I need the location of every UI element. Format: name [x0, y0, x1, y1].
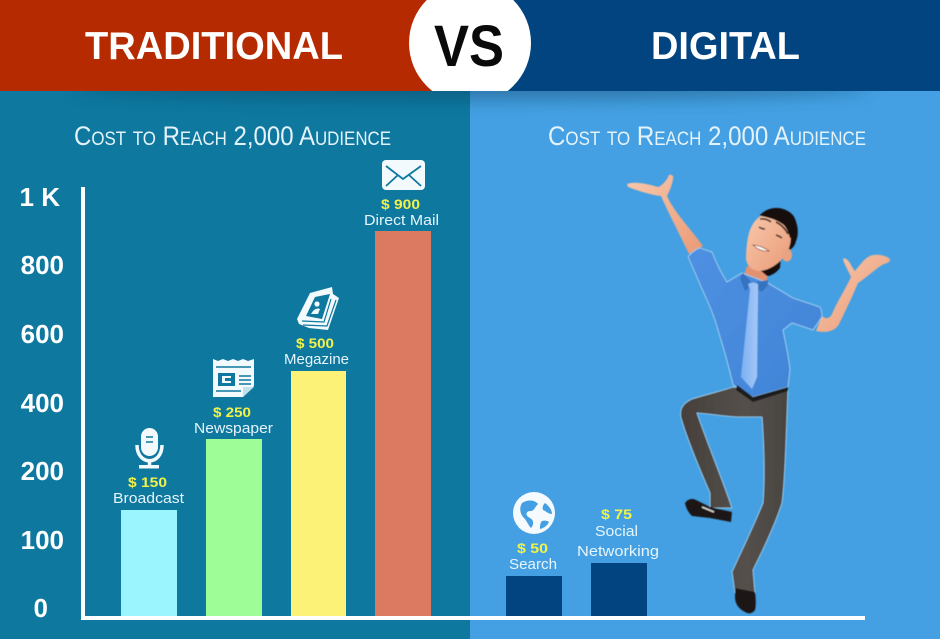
bar: newspaper: [206, 439, 262, 616]
bar: magazine: [291, 371, 346, 616]
raised foot shoe: [685, 499, 732, 522]
panel: digital background: [470, 91, 940, 639]
label: direct mail: [364, 196, 439, 229]
bar: social networking: [591, 563, 647, 616]
subtitle: digital: Cost to Reach 2,000 Audience: [548, 121, 866, 151]
y axis labels: [20, 182, 64, 623]
title: vs: VS: [434, 14, 504, 79]
title: traditional: TRADITIONAL: [85, 25, 343, 68]
bar: direct mail: [375, 231, 431, 616]
hair back: [760, 208, 798, 276]
subtitle: traditional: Cost to Reach 2,000 Audience: [74, 121, 391, 151]
icon: newspaper: [213, 359, 254, 397]
label: magazine: Megazine: [284, 351, 349, 368]
icon: globe: [513, 492, 555, 534]
chart axes: [81, 187, 865, 620]
label: direct mail: Direct Mail: [364, 212, 439, 229]
label: direct mail: $ 900: [381, 196, 420, 212]
label: search: [509, 540, 557, 573]
mouth: [753, 245, 769, 251]
icon: magazines: [297, 287, 339, 330]
label: social networking: [577, 506, 659, 560]
label: newspaper: Newspaper: [194, 420, 273, 437]
lower foot shoe: [735, 588, 756, 613]
y axis labels: 100: [21, 525, 64, 555]
label: magazine: [284, 335, 349, 368]
title: digital: DIGITAL: [651, 25, 800, 68]
right arm and hand: [816, 255, 890, 332]
tie: [741, 282, 758, 389]
character: dancing businessman: [627, 175, 890, 613]
bar: broadcast: [121, 510, 177, 616]
label: social networking: Social: [595, 523, 638, 540]
label: magazine: $ 500: [296, 335, 334, 351]
hair fringe: [760, 208, 797, 238]
header: digital band: [470, 0, 940, 91]
label: search: $ 50: [517, 540, 548, 556]
ear: [782, 248, 792, 262]
label: newspaper: [194, 404, 273, 437]
y axis labels: 400: [21, 388, 64, 418]
neck: [743, 266, 768, 282]
label: social networking: $ 75: [601, 506, 632, 522]
vs circle: [409, 0, 531, 91]
collar: [740, 273, 768, 292]
header: traditional band: [0, 0, 470, 91]
y axis labels: 1 K: [20, 182, 60, 212]
belt: [736, 385, 788, 402]
label: broadcast: [113, 474, 185, 507]
label: social networking: Networking: [577, 543, 659, 560]
header shadow: [70, 76, 870, 100]
icon: envelope: [382, 160, 425, 190]
left arm and hand: [627, 175, 703, 254]
bar: search: [506, 576, 562, 616]
label: search: Search: [509, 556, 557, 573]
head: [746, 216, 791, 271]
label: broadcast: $ 150: [128, 474, 167, 490]
shirt: [688, 248, 822, 397]
icon: microphone: [137, 428, 162, 468]
y axis labels: 800: [21, 250, 64, 280]
y axis labels: 600: [21, 319, 64, 349]
y axis labels: 200: [21, 456, 64, 486]
trousers: [680, 387, 788, 593]
panel: traditional background: [0, 91, 470, 639]
face details: [759, 219, 788, 238]
label: broadcast: Broadcast: [113, 490, 185, 507]
label: newspaper: $ 250: [213, 404, 251, 420]
y axis labels: 0: [34, 593, 48, 623]
